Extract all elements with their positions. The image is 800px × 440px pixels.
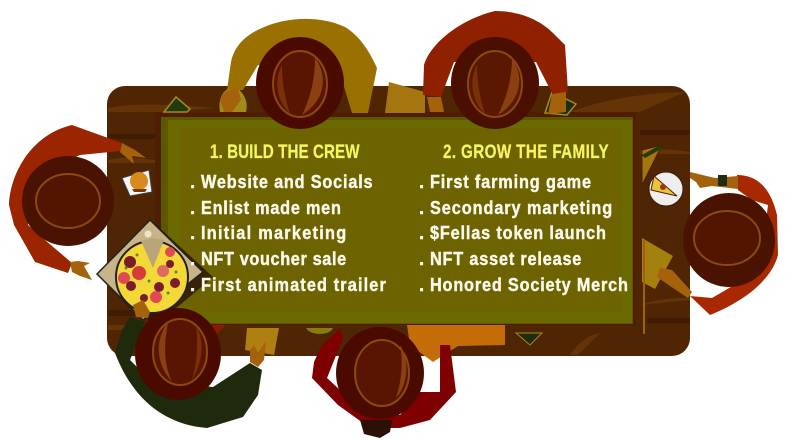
right column list [419, 171, 628, 295]
person: bottom centre in red shirt [312, 327, 456, 438]
right column list: . [419, 222, 424, 243]
right column list: . [419, 274, 424, 295]
person: top right in red shirt [423, 11, 568, 129]
left column list: . [190, 197, 195, 218]
left column list: . [190, 222, 195, 243]
left column heading: 1. BUILD THE CREW [210, 140, 360, 162]
table items: cards and papers [164, 82, 673, 362]
person: bottom left in dark green shirt [115, 300, 266, 428]
right column list: . [419, 171, 424, 192]
right column list: NFT asset release [430, 248, 582, 269]
left column list: Website and Socials [201, 171, 373, 192]
pizza box [97, 220, 213, 326]
right column list: $Fellas token launch [430, 222, 606, 243]
left column list: NFT voucher sale [201, 248, 346, 269]
wooden table [107, 86, 690, 356]
right column list: Secondary marketing [430, 197, 612, 218]
plate with pizza slice [649, 172, 683, 206]
left column list: . [190, 274, 195, 295]
right column list: . [419, 197, 424, 218]
left column list: Initial marketing [201, 222, 346, 243]
left column list [190, 171, 386, 295]
left column list: First animated trailer [201, 274, 386, 295]
burger on napkin [122, 170, 152, 196]
left column list: . [190, 248, 195, 269]
right column heading: 2. GROW THE FAMILY [443, 140, 609, 162]
person: right in red shirt [657, 172, 778, 315]
person: left in red shirt [9, 125, 146, 280]
right column list: First farming game [430, 171, 591, 192]
left column list: . [190, 171, 195, 192]
right column list: . [419, 248, 424, 269]
person: top left in mustard shirt [219, 19, 377, 129]
right column list: Honored Society Merch [430, 274, 628, 295]
chalkboard panel [155, 112, 636, 325]
left column list: Enlist made men [201, 197, 341, 218]
